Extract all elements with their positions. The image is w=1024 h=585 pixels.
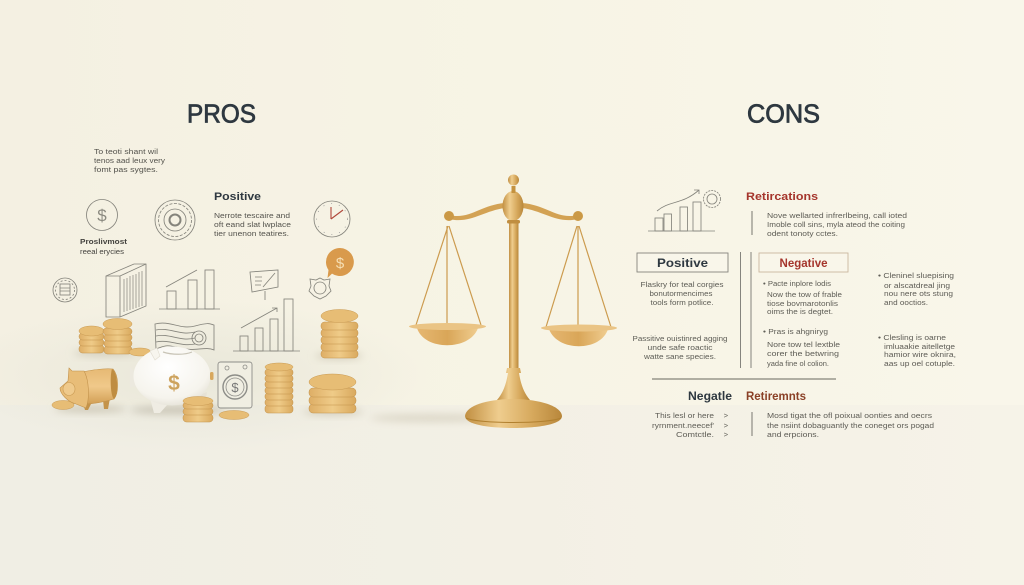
text block: negative column xyxy=(763,279,842,368)
icon: flag note xyxy=(250,270,278,300)
text block: bottom left: Comtctle. xyxy=(676,430,714,439)
text block: bottom right: the nsiint dobaguantly the coneget ors pogad xyxy=(767,421,934,430)
heading: CONS: CONS xyxy=(747,100,820,128)
text block: positive: Nerrote tescaire and xyxy=(214,211,290,220)
text block: right column: aas up oel cotuple. xyxy=(884,359,955,368)
text block: small label xyxy=(80,237,128,256)
text block: intro xyxy=(94,147,165,174)
beam xyxy=(449,203,578,220)
icon: dollar bubble: $ xyxy=(336,255,345,272)
base xyxy=(465,399,562,428)
icon: gear xyxy=(309,278,331,299)
text block: right column: • Cleninel sluepising xyxy=(878,271,954,280)
right pan xyxy=(541,324,617,346)
scale shadow xyxy=(370,414,490,422)
icon: dollar circle xyxy=(86,200,118,230)
text block: right column: imluaakie aitelletge xyxy=(884,342,955,351)
chart: bars 1 xyxy=(159,270,220,309)
text block: restrictions xyxy=(767,211,907,238)
heading: negative retirements right: Retiremnts xyxy=(746,391,806,403)
text block: restrictions: odent tonoty cctes. xyxy=(767,229,838,238)
icon: dollar circle: $ xyxy=(97,206,107,225)
text block: bottom left: > xyxy=(724,421,729,430)
panel: cons xyxy=(632,190,956,439)
divider horizontal xyxy=(652,378,836,380)
divider line xyxy=(751,412,753,436)
chart: growth with gear xyxy=(648,190,720,231)
heading: restrictions: Retircations xyxy=(746,191,818,203)
text block: negative column: tiose bovmarotonlis xyxy=(767,299,838,308)
text block: bottom right xyxy=(767,411,934,439)
icon: dollar bubble xyxy=(326,248,354,278)
left pan strings xyxy=(416,226,481,325)
illustration: dollar card xyxy=(218,362,252,408)
text block: negative column: • Pacte inplore lodis xyxy=(763,279,831,288)
divider line xyxy=(751,211,753,235)
base neck xyxy=(497,368,530,400)
text block: restrictions: Imoble coll sins, myla ateod the coiting xyxy=(767,220,905,229)
icon: small badge xyxy=(53,278,77,302)
text block: right column: or alscatdreal jing xyxy=(884,281,950,290)
text block: positive column: Passitive ouistinred agging xyxy=(632,334,728,343)
illustration: small front coin stack xyxy=(183,396,249,422)
text block: negative column: Nore tow tel lextble xyxy=(767,340,840,349)
text block: restrictions: Nove wellarted infrerlbeing, call ioted xyxy=(767,211,907,220)
text block: positive column: tools form potlice. xyxy=(650,298,714,307)
text block: right column: nou nere ots stung xyxy=(884,289,953,298)
chart: bars 2 xyxy=(233,299,300,351)
text block: right column xyxy=(878,271,956,368)
background floor xyxy=(0,405,1024,585)
illustration: white piggy bank: $ xyxy=(168,372,180,395)
illustration: wide coin stack xyxy=(303,374,363,415)
icon: building xyxy=(106,264,146,317)
text block: right column: hamior wire oknira, xyxy=(884,350,956,359)
box: negative: Negative xyxy=(780,258,828,270)
heading: negative retirements left: Negatle xyxy=(688,391,732,403)
text block: positive: Positive xyxy=(214,191,261,203)
text block: bottom right: and erpcions. xyxy=(767,430,819,439)
text block: positive column: watte sane species. xyxy=(643,352,716,361)
text block: bottom left: This lesl or here xyxy=(655,411,714,420)
icon: banknote xyxy=(155,323,214,350)
box: positive: Positive xyxy=(657,258,708,270)
text block: positive: tier unenon teatires. xyxy=(214,229,289,238)
background wall xyxy=(0,0,1024,405)
heading: PROS: PROS xyxy=(187,100,256,128)
illustration: coin stacks back left xyxy=(73,318,151,356)
text block: intro: To teoti shant wil xyxy=(94,147,158,156)
illustration: white piggy bank xyxy=(130,346,226,414)
text block: positive column: unde safe roactic xyxy=(648,343,713,352)
illustration: tall coin stack xyxy=(265,363,293,413)
text block: small label: reeal erycies xyxy=(80,247,124,256)
panel: pros xyxy=(52,147,363,422)
illustration: gold piggy bank xyxy=(52,368,126,412)
divider lines xyxy=(740,252,751,368)
illustration: balance scale xyxy=(370,174,617,428)
text block: negative column: oims the is degtet. xyxy=(767,307,833,316)
text block: negative column: • Pras is ahgniryg xyxy=(763,327,828,336)
icon: dial xyxy=(155,200,195,240)
text block: bottom left xyxy=(652,411,729,439)
text block: positive: oft eand slat lwplace xyxy=(214,220,291,229)
illustration: coin stack back right xyxy=(315,310,363,359)
text block: bottom left: > xyxy=(724,411,729,420)
right pan strings xyxy=(546,226,611,327)
text block: right column: • Clesling is oarne xyxy=(878,333,946,342)
background shading left xyxy=(0,300,430,450)
finial xyxy=(512,186,516,193)
text block: positive column xyxy=(632,280,728,361)
column xyxy=(509,222,518,372)
text block: intro: fomt pas sygtes. xyxy=(94,165,158,174)
text block: right column: and ooctios. xyxy=(884,298,928,307)
box: positive xyxy=(637,253,728,272)
text block: positive xyxy=(214,191,291,238)
illustration: dollar card: $ xyxy=(231,380,239,395)
text block: bottom left: ryrnment.neecef' xyxy=(652,421,715,430)
text block: positive column: bonutormencimes xyxy=(650,289,713,298)
hub xyxy=(502,191,524,221)
text block: bottom left: > xyxy=(724,430,729,439)
text block: positive column: Flaskry for teal corgies xyxy=(640,280,724,289)
box: negative xyxy=(759,253,848,272)
text block: negative column: yada fine ol colion. xyxy=(767,359,829,368)
text block: negative column: corer the betwring xyxy=(767,349,839,358)
left pan xyxy=(409,323,486,345)
text block: bottom right: Mosd tigat the ofl poixual oonties and oecrs xyxy=(767,411,932,420)
text block: negative column: Now the tow of frable xyxy=(767,290,842,299)
icon: clock xyxy=(314,201,350,237)
text block: intro: tenos aad leux very xyxy=(94,156,165,165)
text block: small label: Proslivmost xyxy=(80,237,128,246)
